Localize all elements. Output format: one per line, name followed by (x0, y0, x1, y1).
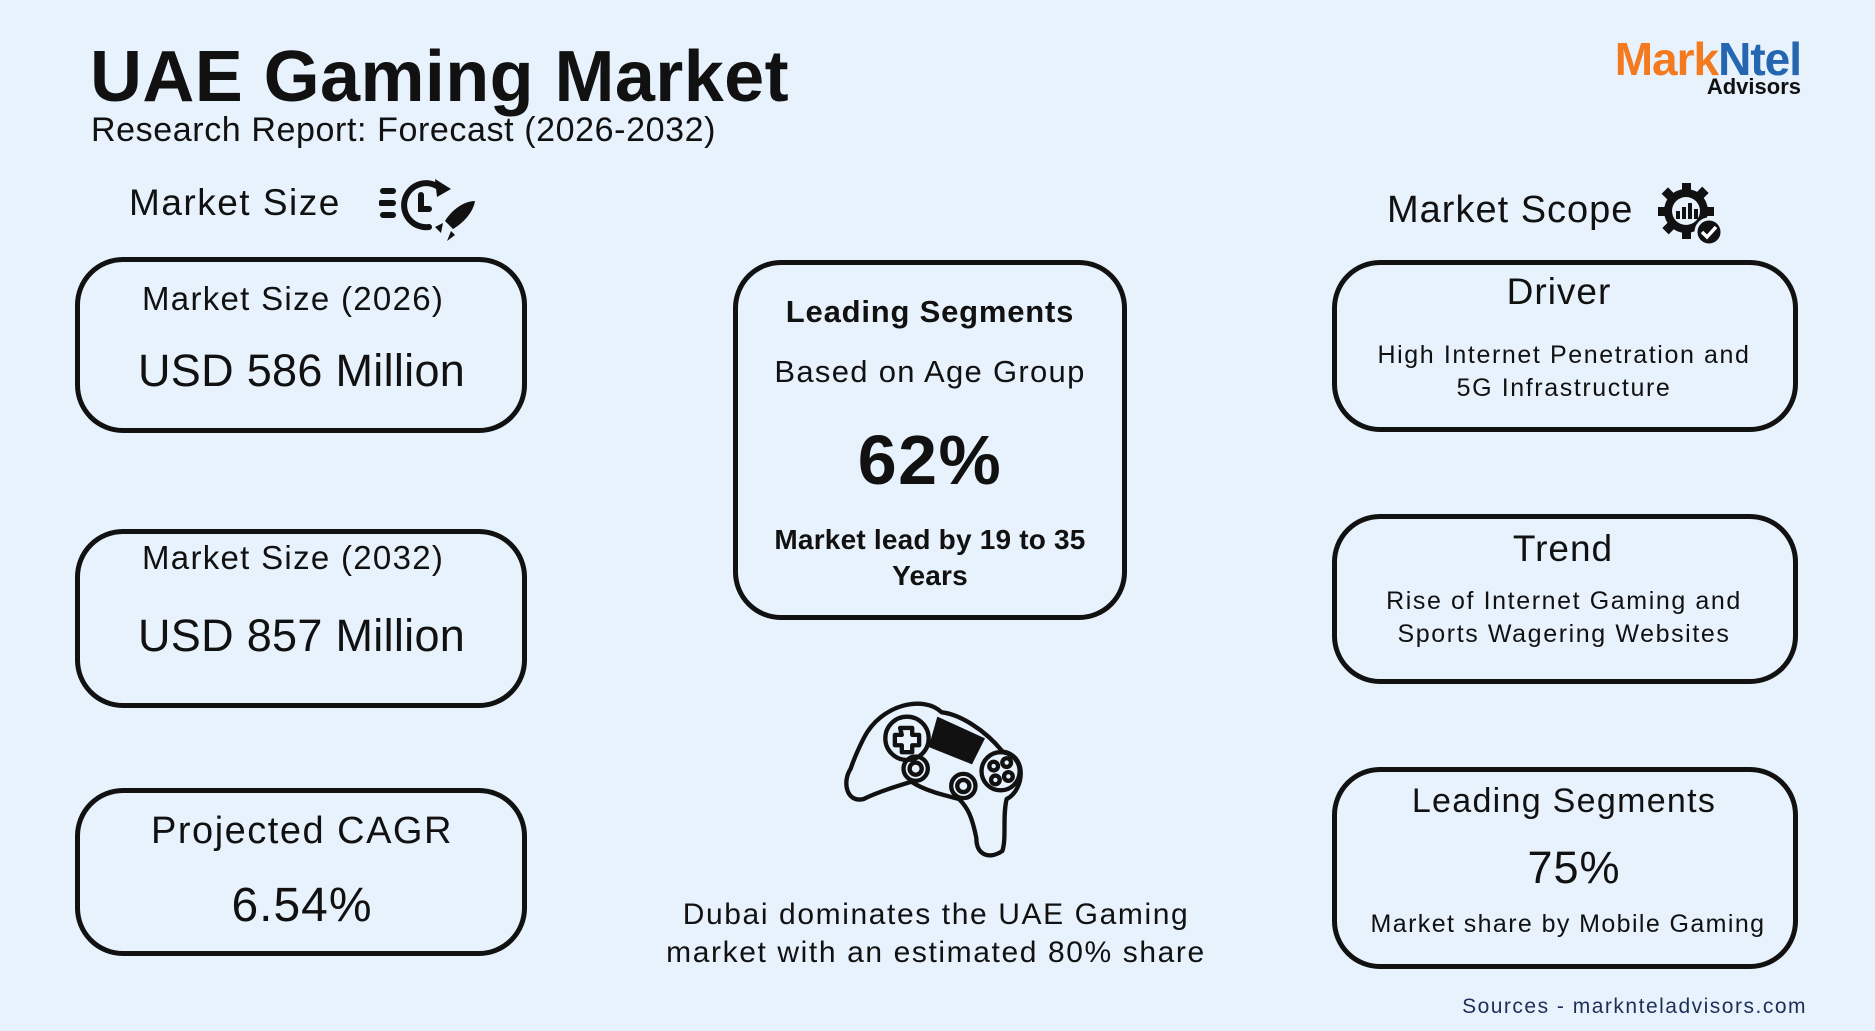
text: Dubai dominates (666, 898, 1206, 969)
panel: driver: High Internet Penetration and (1377, 341, 1751, 369)
panel: market size 2032 (75, 529, 527, 708)
text: Dubai dominates: Dubai dominates the UAE Gaming (683, 898, 1189, 931)
panel: leading segments age group (733, 260, 1127, 620)
panel: trend: Sports Wagering Websites (1398, 620, 1730, 648)
panel: leading segments mobile: 75% (1527, 842, 1621, 893)
heading: market scope: Market Scope (1387, 189, 1633, 231)
panel: projected CAGR: 6.54% (231, 879, 373, 932)
panel: leading segments age group: Market lead by 19 to 35 (774, 524, 1086, 555)
panel: driver: Driver (1507, 271, 1611, 312)
panel: trend (1332, 514, 1798, 684)
panel: projected CAGR (75, 788, 527, 956)
panel: leading segments mobile: Leading Segments (1412, 782, 1716, 820)
panel: market size 2032: USD 857 Million (138, 610, 465, 661)
panel: market size 2026 (75, 257, 527, 433)
heading: market size: Market Size (129, 182, 341, 223)
panel: leading segments age group: Based on Age Group (774, 354, 1086, 389)
panel: leading segments age group: Years (892, 560, 968, 591)
panel: leading segments mobile (1332, 767, 1798, 969)
sources: Sources - marknteladvisors.com (1462, 995, 1807, 1018)
logo: Advisors (1707, 74, 1801, 99)
panel: trend: Trend (1513, 528, 1613, 569)
panel: driver: 5G Infrastructure (1457, 374, 1671, 402)
panel: trend: Rise of Internet Gaming and (1386, 587, 1742, 615)
subtitle: Research Report: Forecast (2026-2032) (91, 111, 716, 149)
panel: market size 2026: USD 586 Million (138, 345, 465, 396)
panel: market size 2026: Market Size (2026) (142, 280, 444, 317)
panel: projected CAGR: Projected CAGR (151, 810, 453, 852)
panel: leading segments age group: Leading Segments (786, 294, 1074, 329)
panel: driver (1332, 260, 1798, 432)
icon: gear chart check (1658, 183, 1720, 244)
icon: clock rocket (379, 179, 475, 241)
icon: game controller (844, 702, 1023, 858)
logo: MarkNtel (1615, 33, 1801, 85)
panel: leading segments age group: 62% (858, 421, 1002, 499)
panel: market size 2032: Market Size (2032) (142, 539, 444, 576)
title: UAE Gaming Market (90, 37, 789, 117)
panel: leading segments mobile: Market share by Mobile Gaming (1371, 910, 1765, 938)
text: Dubai dominates: market with an estimated 80% share (666, 936, 1206, 969)
